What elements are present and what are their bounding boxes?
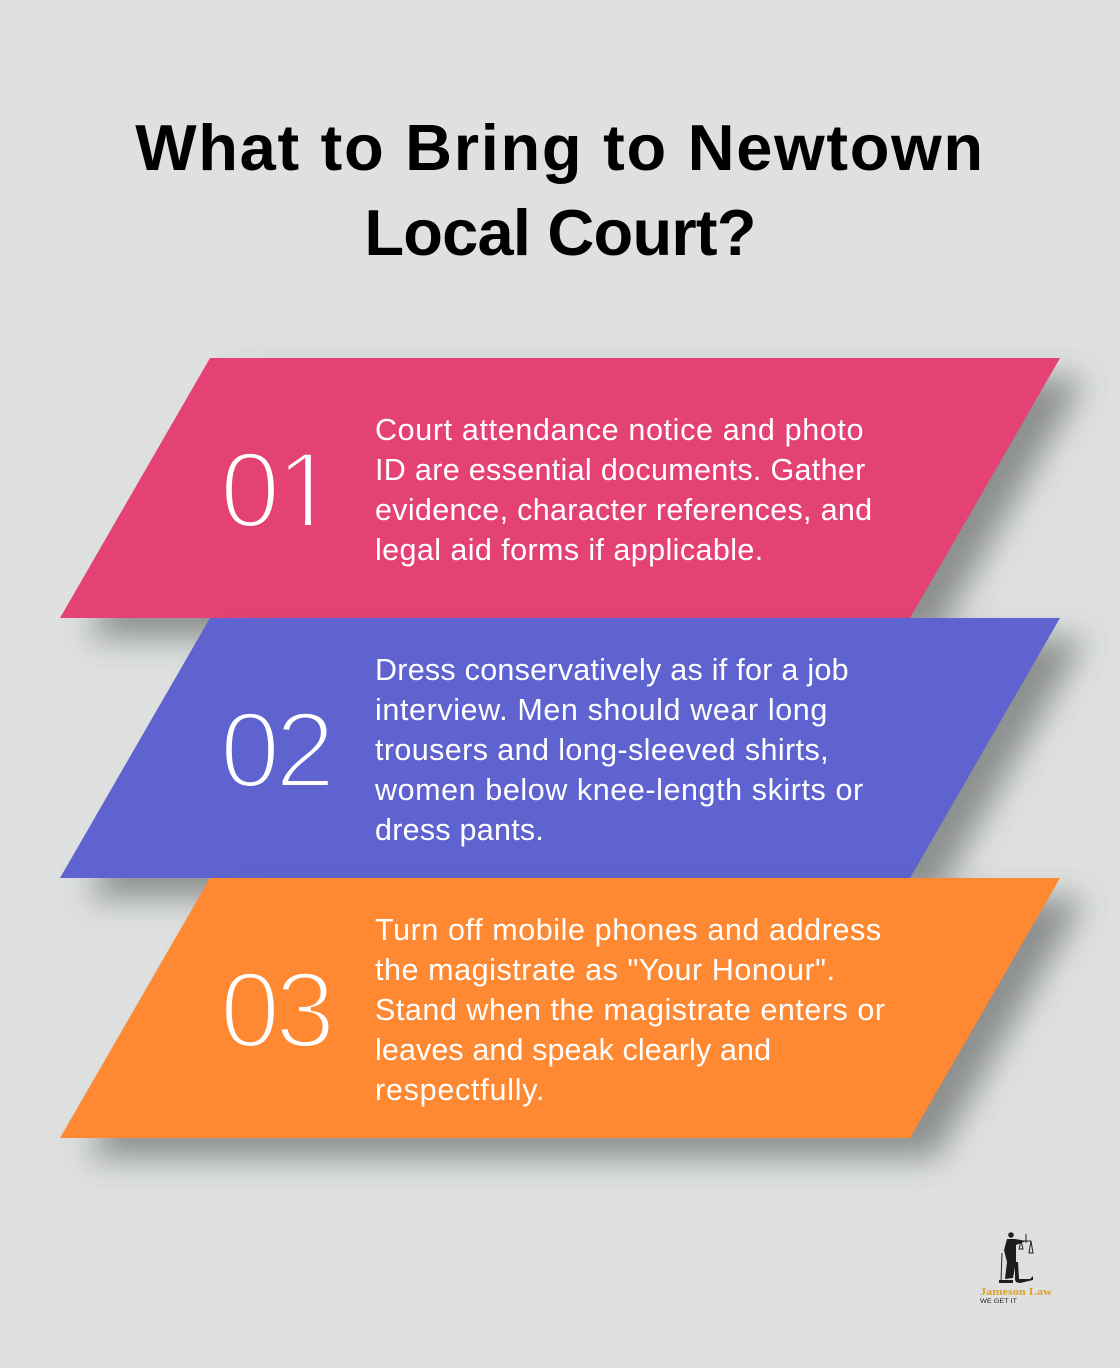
step 3 text: leaves and speak clearly and	[375, 1033, 771, 1067]
step 1 text	[375, 413, 872, 567]
title: Local Court?	[364, 196, 756, 269]
step 1 text: legal aid forms if applicable.	[375, 533, 764, 567]
step 1 text: Court attendance notice and photo	[375, 413, 864, 447]
logo: Jameson Law	[980, 1232, 1052, 1305]
logo tagline: WE GET IT	[980, 1299, 1017, 1305]
step 2 number: 02	[220, 689, 330, 810]
step 2 text: interview. Men should wear long	[375, 693, 828, 727]
title	[135, 111, 985, 269]
step 2 text: dress pants.	[375, 813, 544, 847]
step 2 text: trousers and long-sleeved shirts,	[375, 733, 829, 767]
logo name: Jameson Law	[980, 1287, 1052, 1298]
step 3 text: Stand when the magistrate enters or	[375, 993, 886, 1027]
step 3 text: respectfully.	[375, 1073, 545, 1107]
icon: lady justice	[999, 1232, 1033, 1283]
step 1 text: evidence, character references, and	[375, 493, 872, 527]
step 3 text: the magistrate as "Your Honour".	[375, 953, 836, 987]
step 2 text: Dress conservatively as if for a job	[375, 653, 849, 687]
step 3 text	[375, 913, 886, 1107]
panel: step 3 parallelogram	[60, 878, 1086, 1158]
step 2 text	[375, 653, 864, 847]
step 3 number: 03	[220, 949, 330, 1070]
title: What to Bring to Newtown	[135, 111, 985, 184]
panel: step 2 parallelogram	[60, 618, 1086, 898]
step 1 number: 01	[220, 429, 332, 550]
step 3 text: Turn off mobile phones and address	[375, 913, 882, 947]
step 1 text: ID are essential documents. Gather	[375, 453, 866, 487]
step 2 text: women below knee-length skirts or	[375, 773, 864, 807]
panel: step 1 parallelogram	[60, 358, 1086, 638]
